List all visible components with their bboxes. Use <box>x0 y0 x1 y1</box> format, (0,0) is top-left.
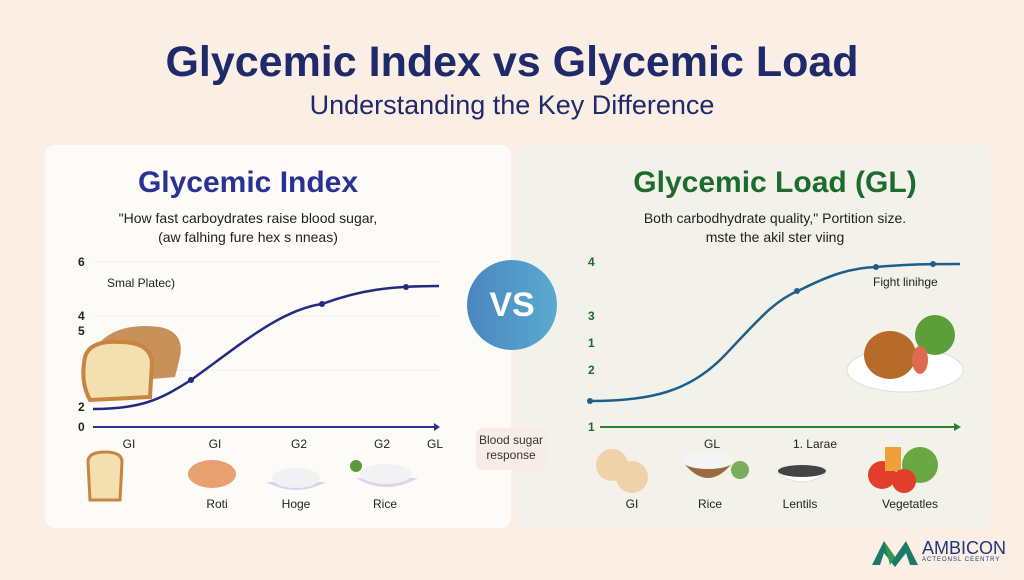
icon: VS circle <box>467 260 557 350</box>
chart: GI and GL curves: 4 <box>588 255 595 269</box>
chart: GI and GL curves: Lentils <box>783 497 817 511</box>
title: Glycemic Index vs Glycemic Load <box>165 38 859 86</box>
icon: bread loaf <box>81 326 181 402</box>
chart: GI and GL curves: 5 <box>78 324 85 338</box>
text: GI description <box>119 210 377 245</box>
heading: glycemic load: Glycemic Load (GL) <box>633 166 917 199</box>
text: GI description: (aw falhing fure hex s nneas) <box>158 229 338 245</box>
callout: blood sugar response: Blood sugar <box>479 433 543 447</box>
text: GL description: Both carbodhydrate quality," Portition size. <box>644 210 906 226</box>
chart: GI and GL curves: 1. Larae <box>793 437 837 451</box>
chart: GI and GL curves: Rice <box>698 497 722 511</box>
chart: GI and GL curves: 6 <box>78 255 85 269</box>
callout: blood sugar response <box>476 428 546 470</box>
icon: food row right <box>596 447 938 493</box>
chart: GI and GL curves: 4 <box>78 309 85 323</box>
chart: GI and GL curves: Fight linihge <box>873 275 938 289</box>
icon: food row left <box>86 450 418 502</box>
chart: GI and GL curves: 2 <box>78 400 85 414</box>
chart: GI and GL curves: G2 <box>374 437 390 451</box>
icon: VS circle: VS <box>489 286 535 324</box>
logo: AMBICON <box>922 538 1006 558</box>
logo: ACTEONSL CEENTRY <box>922 557 1000 563</box>
chart: GI and GL curves: Vegetatles <box>882 497 938 511</box>
chart: GI and GL curves: Roti <box>206 497 228 511</box>
chart: GI and GL curves: G2 <box>291 437 307 451</box>
text: GI description: "How fast carboydrates raise blood sugar, <box>119 210 377 226</box>
chart: GI and GL curves: GI <box>626 497 638 511</box>
text: GL description <box>644 210 906 245</box>
chart: GI and GL curves: 0 <box>78 420 85 434</box>
text: GL description: mste the akil ster viing <box>706 229 844 245</box>
chart: GI and GL curves: GI <box>123 437 135 451</box>
chart: GI and GL curves: GL <box>704 437 720 451</box>
chart: GI and GL curves: Smal Platec) <box>107 276 175 290</box>
subtitle: Understanding the Key Difference <box>310 90 714 120</box>
chart: GI and GL curves: Rice <box>373 497 397 511</box>
chart: GI and GL curves: 2 <box>588 363 595 377</box>
chart: GI and GL curves: Hoge <box>282 497 311 511</box>
chart: GI and GL curves: GL <box>427 437 443 451</box>
chart: GI and GL curves: GI <box>209 437 221 451</box>
panel: glycemic index <box>45 145 511 528</box>
logo <box>872 538 1006 567</box>
icon: plate with food <box>846 315 964 392</box>
panel: glycemic load <box>515 145 992 528</box>
chart: GI and GL curves: 3 <box>588 309 595 323</box>
heading: glycemic index: Glycemic Index <box>138 166 358 199</box>
chart: GI and GL curves: 1 <box>588 336 595 350</box>
callout: blood sugar response: response <box>486 448 536 462</box>
chart: GI and GL curves: 1 <box>588 420 595 434</box>
